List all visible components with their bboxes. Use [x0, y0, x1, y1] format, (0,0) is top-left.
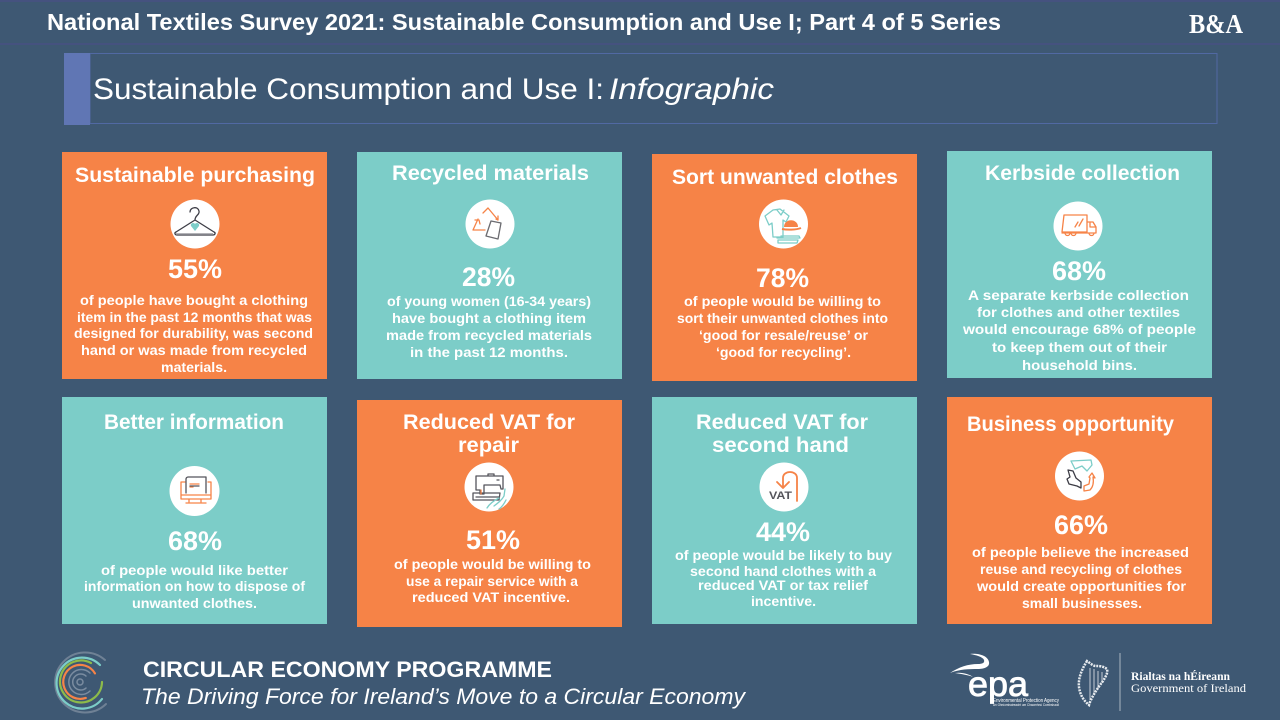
body text: [74, 292, 313, 375]
body text: made from recycled materials: [386, 327, 592, 343]
statistic: 44%: [756, 517, 810, 547]
title: National Textiles Survey 2021: Sustainable Consumption and Use I; Part 4 of 5 Series: [47, 9, 1001, 35]
body text: of people would be willing to: [394, 556, 591, 572]
panel: better information: [62, 397, 327, 624]
panel: recycled materials: [357, 152, 622, 379]
section heading italic word: Infographic: [609, 73, 774, 106]
statistic: 66%: [1054, 510, 1108, 540]
body text: reduced VAT incentive.: [412, 589, 570, 605]
body text: of people have bought a clothing: [80, 292, 308, 308]
body text: reduced VAT or tax relief: [698, 577, 868, 593]
icon: clothes pile: [759, 200, 808, 248]
heading: repair: [458, 434, 519, 457]
body text: small businesses.: [1022, 595, 1142, 611]
footer: programme logo: [55, 652, 106, 712]
body text: would encourage 68% of people: [962, 321, 1196, 337]
body text: hand or was made from recycled: [81, 342, 307, 358]
panel: reduced VAT for repair: [357, 400, 622, 627]
footer: programme tagline: The Driving Force for Ireland’s Move to a Circular Economy: [141, 684, 747, 709]
body text: information on how to dispose of: [84, 578, 305, 594]
body text: of people would like better: [101, 562, 289, 578]
footer: programme title: CIRCULAR ECONOMY PROGRAMME: [143, 657, 552, 682]
body text: [962, 287, 1196, 373]
icon: VAT arrow: [760, 462, 808, 512]
panel: sustainable purchasing: [62, 152, 327, 379]
heading: Reduced VAT for: [403, 411, 575, 434]
section heading bar: [64, 53, 1217, 125]
body text: sort their unwanted clothes into: [677, 310, 888, 326]
heading: Reduced VAT for: [696, 411, 868, 434]
body text: of people believe the increased: [972, 544, 1189, 560]
logo: EPA: epa: [968, 665, 1029, 704]
divider: [1120, 653, 1121, 711]
body text: of people would be willing to: [684, 293, 881, 309]
body text: [677, 293, 888, 360]
icon: computer monitor with document: [170, 466, 220, 516]
heading: [696, 411, 868, 457]
statistic: 68%: [1052, 256, 1106, 286]
logo: EPA: Environmental Protection Agency: [993, 698, 1059, 704]
logo: government of Ireland: Government of Ireland: [1131, 681, 1246, 695]
body text: [84, 562, 305, 611]
body text: of people would be likely to buy: [675, 547, 892, 563]
body text: would create opportunities for: [976, 578, 1187, 594]
icon: recycling arrows and skirt: [466, 200, 514, 248]
panel: sort unwanted clothes: [652, 154, 917, 381]
statistic: 28%: [462, 262, 515, 292]
body text: [394, 556, 591, 605]
logo: government of Ireland: [1131, 669, 1246, 695]
body text: second hand clothes with a: [690, 563, 876, 579]
body text: [972, 544, 1189, 611]
body text: ‘good for resale/reuse’ or: [699, 327, 869, 343]
statistic: 51%: [466, 525, 520, 555]
heading: Sort unwanted clothes: [672, 166, 898, 189]
heading: [403, 411, 575, 457]
body text: unwanted clothes.: [132, 595, 257, 611]
body text: in the past 12 months.: [410, 344, 568, 360]
panel: kerbside collection: [947, 151, 1212, 378]
statistic: 55%: [168, 254, 222, 284]
body text: materials.: [161, 359, 227, 375]
body text: household bins.: [1022, 357, 1137, 373]
logo: EPA: An Ghníomhaireacht um Chaomhnú Comhshaoil: [993, 703, 1059, 707]
logo: government of Ireland: Rialtas na hÉireann: [1131, 669, 1230, 683]
body text: ‘good for recycling’.: [716, 344, 851, 360]
icon: coat hanger: [170, 200, 220, 248]
body text: [675, 547, 892, 609]
logo: harp: [1079, 661, 1107, 705]
body text: incentive.: [751, 593, 816, 609]
section heading text: Sustainable Consumption and Use I:: [93, 73, 604, 106]
header band: [0, 1, 1280, 44]
body text: to keep them out of their: [992, 339, 1168, 355]
panel: reduced VAT for second hand: [652, 397, 917, 624]
body text: reuse and recycling of clothes: [980, 561, 1182, 577]
heading: second hand: [712, 434, 849, 457]
body text: A separate kerbside collection: [968, 287, 1189, 303]
icon: truck: [1054, 202, 1102, 250]
body text: use a repair service with a: [406, 573, 578, 589]
logo: B&A: B&A: [1189, 9, 1243, 39]
logo: EPA: [950, 654, 1059, 707]
heading: Better information: [104, 411, 284, 434]
statistic: 68%: [168, 526, 222, 556]
statistic: 78%: [756, 263, 809, 293]
heading: Sustainable purchasing: [75, 164, 315, 187]
body text: for clothes and other textiles: [977, 304, 1180, 320]
panel: business opportunity: [947, 397, 1212, 624]
body text: item in the past 12 months that was: [77, 309, 312, 325]
body text: have bought a clothing item: [392, 310, 586, 326]
icon: VAT arrow: VAT: [769, 490, 792, 502]
body text: [386, 293, 592, 360]
heading: Business opportunity: [967, 413, 1174, 436]
body text: designed for durability, was second: [74, 325, 313, 341]
icon: recycling clothes: [1055, 452, 1104, 500]
heading: Recycled materials: [392, 162, 589, 185]
body text: of young women (16-34 years): [387, 293, 591, 309]
icon: sewing machine and hand: [464, 462, 514, 512]
heading: Kerbside collection: [985, 162, 1180, 185]
